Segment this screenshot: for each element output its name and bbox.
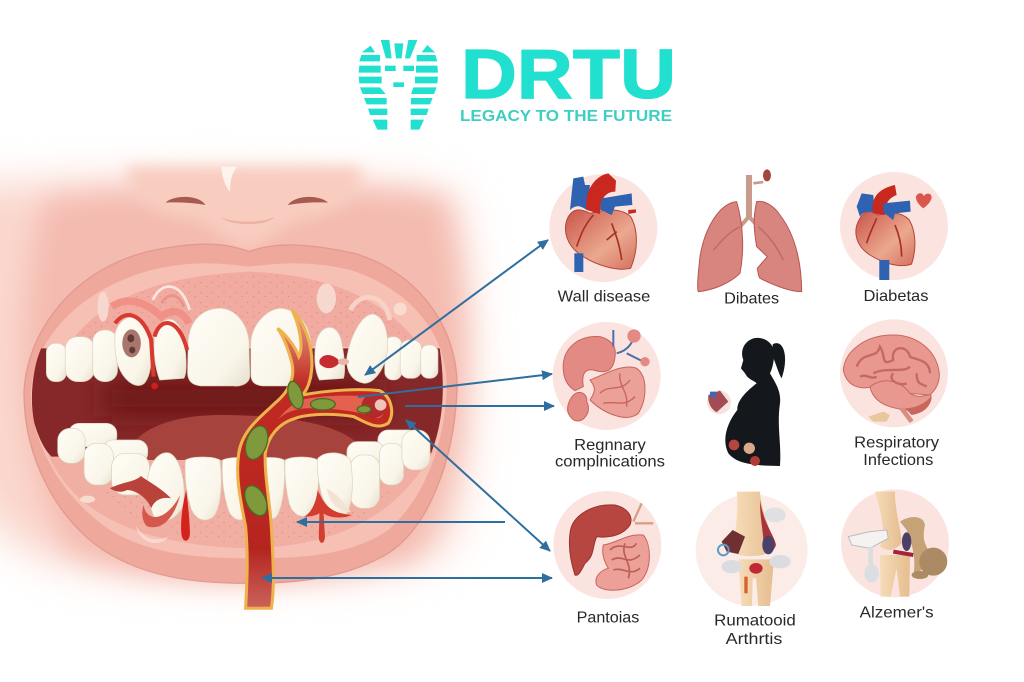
label: Respiratory Infections: Infections <box>863 452 933 469</box>
cavity on upper tooth <box>122 329 141 357</box>
icon: brain <box>840 319 948 427</box>
nose <box>127 167 361 248</box>
label: Wall disease: Wall disease <box>558 289 650 306</box>
upper gum decay and bleeding <box>98 283 407 389</box>
bacteria <box>240 380 371 519</box>
label: Regnnary complications: Regnnary <box>574 437 646 454</box>
blood vessel <box>238 310 392 608</box>
icon grid <box>549 169 948 471</box>
icon: joint with spine <box>841 489 949 597</box>
arrow: molar to pancreas <box>406 420 550 551</box>
label: Dibates: Dibates <box>724 290 779 307</box>
logo tagline: LEGACY TO THE FUTURE <box>460 108 672 125</box>
arrow: tooth to heart <box>365 240 548 375</box>
icon: knee joint <box>696 492 808 606</box>
icon: heart with small heart <box>840 172 948 280</box>
label: Rumatooid Arthrtis: Arthrtis <box>726 631 782 648</box>
label: Rumatooid Arthrtis: Rumatooid <box>714 612 796 629</box>
arrow: vessel to digestive lower <box>405 405 554 407</box>
label: Pantoias: Pantoias <box>577 610 639 627</box>
tongue <box>127 415 364 460</box>
logo: DRTU <box>359 35 676 130</box>
arrow: vessel to digestive upper <box>358 374 552 397</box>
icon: lungs <box>698 169 802 292</box>
gum stipple <box>69 273 419 543</box>
arrows <box>262 240 554 578</box>
lips <box>24 244 457 583</box>
icon: pharaoh tooth <box>359 40 438 130</box>
lower gum decay and bleeding <box>80 476 352 543</box>
icon: heart in circle <box>549 173 657 282</box>
label: Respiratory Infections: Respiratory <box>854 434 939 451</box>
icon: digestive organs <box>553 322 661 430</box>
arrow: lower gum <box>297 521 505 523</box>
upper teeth <box>46 308 438 386</box>
icon: stomach and intestine <box>553 491 661 599</box>
gums <box>31 263 447 558</box>
icon: pregnant silhouette <box>707 338 785 466</box>
arrow: vessel to pancreas <box>262 577 552 579</box>
label: Regnnary complications <box>555 437 665 471</box>
lower teeth <box>58 423 430 521</box>
label: Regnnary complications: complnications <box>555 454 665 471</box>
logo wordmark: DRTU <box>461 35 676 113</box>
label: Rumatooid Arthrtis <box>714 612 796 648</box>
label: Respiratory Infections <box>854 434 939 469</box>
mouth illustration <box>0 167 473 608</box>
face background <box>0 178 473 580</box>
label: Alzemer's: Alzemer's <box>860 604 934 621</box>
mouth cavity <box>32 348 443 457</box>
label: Diabetas: Diabetas <box>863 288 928 305</box>
